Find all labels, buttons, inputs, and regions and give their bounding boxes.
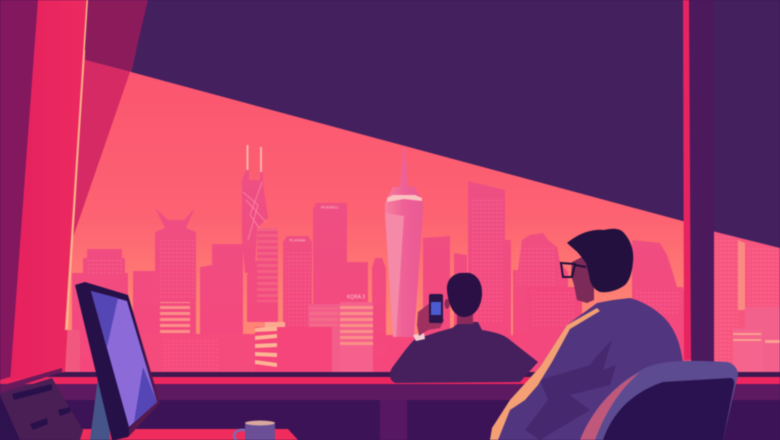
building: tall dark block: RUSSELL [321, 204, 340, 210]
head [447, 273, 482, 317]
building: behind man with glasses [632, 240, 688, 372]
building: tall textured block [468, 181, 511, 372]
city base haze [65, 335, 690, 372]
skyline left [72, 145, 386, 372]
one-world tower [385, 148, 423, 337]
building: tall dark block [313, 203, 347, 372]
building: foreground low block left [128, 334, 255, 372]
curtain upper fold [85, 0, 148, 72]
chair back [603, 378, 734, 440]
man with glasses [490, 229, 684, 440]
building: lattice tower with twin antennas [242, 145, 278, 322]
building: stepped tower far left [72, 249, 128, 372]
monitor body [75, 282, 160, 440]
building: sign block: KQRA 3 [347, 294, 365, 300]
building: small blocks [347, 262, 368, 372]
left purple pillar [0, 0, 39, 380]
right window pane [714, 225, 780, 375]
window sky [60, 50, 700, 375]
building: rounded top tower [283, 236, 312, 372]
cuff [413, 333, 425, 341]
hand [417, 303, 444, 336]
curtain lower fold [72, 60, 130, 240]
office chair [580, 361, 738, 440]
building: cream slatted block [255, 322, 332, 372]
skyline right [423, 181, 688, 372]
monitor [75, 282, 160, 440]
building: rounded top tower: PLASMA [289, 238, 306, 242]
shoulder highlight [490, 308, 600, 440]
ears [444, 299, 450, 309]
rim highlight [580, 372, 640, 440]
face [571, 250, 596, 303]
building: horned tower [155, 208, 201, 372]
mullion [683, 0, 714, 362]
left pink pillar [10, 0, 87, 380]
phone screen [431, 302, 441, 315]
coffee mug [234, 420, 275, 440]
shirt [490, 298, 684, 440]
monitor screen [91, 291, 157, 427]
printer [0, 368, 83, 440]
man with phone [390, 273, 538, 383]
building: far-left low block [65, 330, 80, 372]
building: lower-left window grid [163, 340, 218, 370]
hair [567, 229, 633, 292]
glasses [561, 263, 586, 277]
building: wide block [200, 244, 243, 372]
desk [78, 429, 298, 440]
neck [457, 312, 473, 324]
monitor stand [90, 378, 110, 440]
phone [429, 294, 443, 323]
building: stepped cluster [513, 233, 582, 372]
window frame bottom sill [0, 372, 780, 440]
shirt shadow [525, 340, 616, 440]
right blind [712, 0, 780, 248]
chair rim [580, 361, 738, 440]
building: sign block [308, 294, 373, 372]
jacket [390, 322, 538, 383]
cream edge line [65, 0, 88, 330]
ceiling blind [131, 0, 690, 223]
building: behind tower [423, 236, 450, 372]
building: low block [133, 271, 157, 372]
low stripe towers [65, 294, 373, 372]
